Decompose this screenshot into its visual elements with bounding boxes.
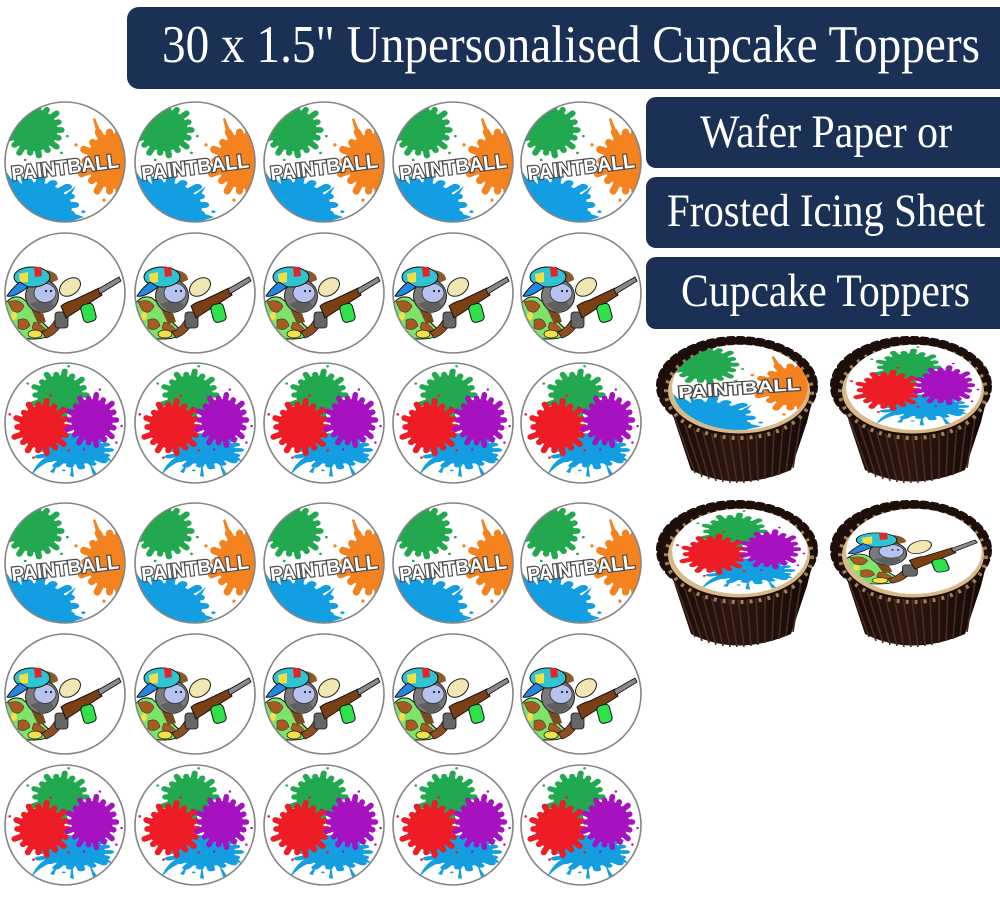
label: wafer paper: Wafer Paper or xyxy=(700,106,952,158)
row: paintball logo toppers: PAINTBALL xyxy=(398,150,508,185)
cupcake: paintball logo: PAINTBALL xyxy=(678,375,801,402)
title banner xyxy=(127,7,1000,89)
cupcake: paintball player xyxy=(833,503,989,647)
row: paint splat toppers xyxy=(4,362,642,484)
row: paintball logo toppers xyxy=(0,500,668,638)
cupcake: paintball logo xyxy=(649,339,838,483)
row: paintball player toppers xyxy=(4,633,642,755)
row: paintball logo toppers: PAINTBALL xyxy=(269,150,379,185)
row: paintball logo toppers: PAINTBALL xyxy=(10,551,120,586)
row: paintball logo toppers: PAINTBALL xyxy=(398,551,508,586)
panel: decorated cupcakes xyxy=(649,339,989,647)
row: paintball logo toppers: PAINTBALL xyxy=(526,150,636,185)
row: paintball player toppers xyxy=(4,232,642,354)
row: paintball logo toppers: PAINTBALL xyxy=(269,551,379,586)
row: paintball logo toppers xyxy=(0,99,668,237)
label: cupcake toppers xyxy=(646,257,1000,329)
panel: topper sheet two xyxy=(0,500,668,886)
row: paintball logo toppers: PAINTBALL xyxy=(140,551,250,586)
row: paint splat toppers xyxy=(4,764,642,886)
cupcake: paint splats xyxy=(833,339,989,483)
row: paintball logo toppers: PAINTBALL xyxy=(140,150,250,185)
label: wafer paper xyxy=(646,97,1000,168)
label: cupcake toppers: Cupcake Toppers xyxy=(681,265,970,317)
panel: topper sheet one xyxy=(0,99,668,484)
row: paintball logo toppers: PAINTBALL xyxy=(526,551,636,586)
row: paintball logo toppers: PAINTBALL xyxy=(10,150,120,185)
label: frosted icing sheet xyxy=(646,177,1000,248)
cupcake: paint splats xyxy=(659,503,815,647)
